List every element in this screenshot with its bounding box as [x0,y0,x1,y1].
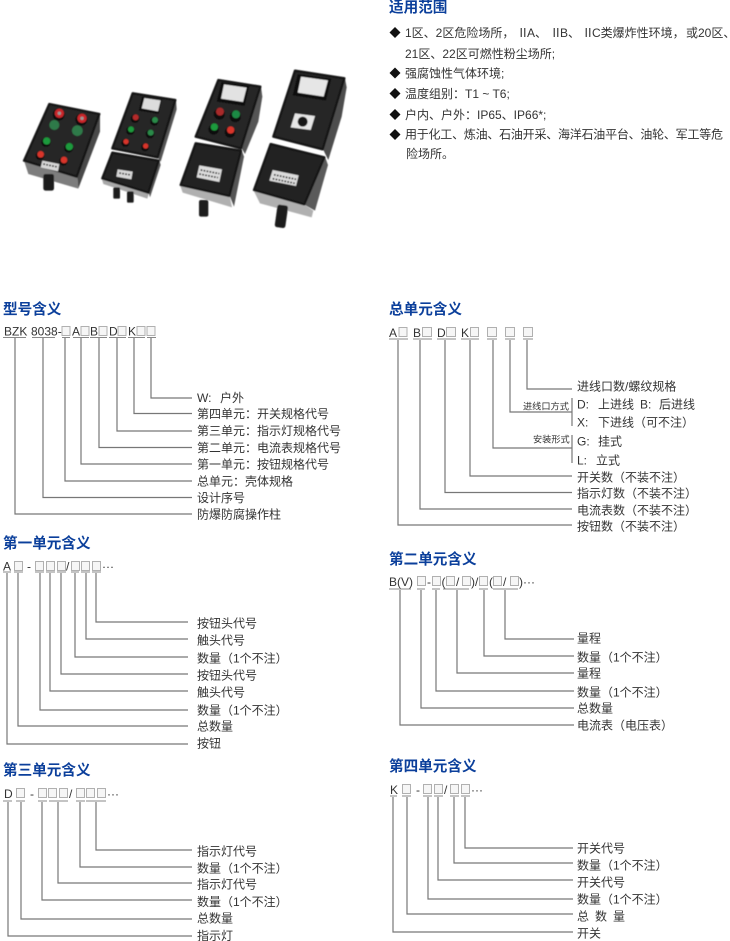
bullet list: 21区、22区可燃性粉尘场所; [405,46,555,61]
second unit code row: B(V) [389,575,413,589]
bullet list: 强腐蚀性气体环境; [405,66,504,80]
leader: total quantity [407,797,625,924]
leader: switch code [465,797,625,856]
model code row: 8038- [31,324,62,338]
leader: total quantity: 总数量 [197,718,233,734]
leader: design number [43,338,245,505]
second unit code row: )/ [471,575,479,589]
first unit code row: A [3,560,11,574]
leader: quantity [40,573,288,718]
panel: first unit meaning [3,534,288,750]
heading: general unit meaning: 总单元含义 [389,300,462,318]
leader: first unit: 第一单元：按钮规格代号 [197,456,329,472]
leader: ammeter or voltmeter: 电流表（电压表） [577,718,673,732]
product 4: meter, rotary switch and terminal box [253,71,347,228]
leader: quantity: 数量（1个不注） [577,858,668,872]
bullet list: C类爆炸性环境， [592,25,685,40]
heading: second unit meaning: 第二单元含义 [389,550,477,568]
fourth unit code row: K [390,783,398,797]
leader: general unit: 总单元：壳体规格 [197,474,293,488]
leader: button count [398,340,685,534]
leader: switch [393,797,601,940]
product photo: four explosion-proof control boxes [24,71,347,228]
leader: quantity: 数量（1个不注） [197,650,288,666]
leader: ammeter count: 电流表数（不装不注） [577,502,697,518]
panel: fourth unit meaning [389,757,668,940]
second unit code row: / [503,575,507,589]
leader: switch: 开关 [577,926,601,940]
panel: general unit meaning [389,300,697,534]
leader: button [7,573,221,750]
leader: total quantity [18,573,233,734]
leader: quantity: 数量（1个不注） [577,684,668,700]
leader: button head code: 按钮头代号 [197,616,257,630]
bullet list: Ⅱ [550,26,562,40]
leader: outdoor: 户外 [220,390,244,405]
bullet list [390,25,730,161]
third unit code row: D [4,787,13,801]
general unit code row: D [437,326,446,340]
leader: total quantity: 数 [595,908,607,924]
leader: mounting form [493,340,622,468]
leader: ammeter or voltmeter [400,590,673,732]
product 1: two-row button box [24,104,100,191]
third unit code row: ··· [107,787,119,801]
heading: fourth unit meaning: 第四单元含义 [389,757,477,775]
fourth unit code row: - [416,783,420,797]
third unit code row: - [30,787,34,801]
model code row: B [90,324,98,338]
second unit code row: ( [489,575,493,589]
leader: inlet method: 下进线（可不注） [598,414,694,430]
first unit code row: ··· [102,560,114,574]
leader: second unit [99,338,341,455]
third unit code row: / [69,787,73,801]
bullet list: 户内、户外：IP65、IP66*; [405,107,546,122]
leader: switch count [470,340,685,484]
leader: ammeter count [420,340,697,518]
leader: total quantity [421,590,613,716]
first unit code row: / [66,560,70,574]
bullet list: 险场所。 [406,146,454,161]
leader: lamp code [96,802,257,858]
leader: button head code: 按钮头代号 [197,668,257,682]
model code row: A [72,324,80,338]
leader: total quantity [21,802,233,926]
leader: switch code [438,797,625,890]
panel: applicable scope [389,0,730,161]
general unit code row: A [389,326,397,340]
first unit code row: - [27,560,31,574]
leader: fourth unit: 第四单元：开关规格代号 [197,406,329,421]
model code row: K [128,324,136,338]
leader: contact code: 触头代号 [197,686,245,700]
model code row [3,324,156,338]
leader: total quantity: 量 [613,910,625,924]
second unit code row [389,575,535,589]
leader: contact code [86,573,245,648]
leader: mounting form: L: [577,454,587,468]
leader: inlet count and thread: 进线口数/螺纹规格 [577,378,676,394]
leader: design number: 设计序号 [197,490,245,505]
general unit code row: B [413,326,421,340]
leader: mounting form: 立式 [596,452,620,468]
leader: contact code: 触头代号 [197,634,245,648]
leader: general unit [65,338,293,488]
leader: range [505,590,601,646]
leader: inlet method: X: [577,416,588,430]
leader: quantity [42,802,288,909]
leader: inlet method: 上进线 [598,398,634,412]
leader: range: 量程 [577,630,601,646]
leader: control post [15,338,281,522]
heading: applicable scope: 适用范围 [389,0,447,16]
leader: button: 按钮 [197,736,221,750]
panel: second unit meaning [389,550,673,732]
leader: third unit [117,338,341,438]
leader: quantity: 数量（1个不注） [577,892,668,906]
leader: fourth unit [134,338,329,421]
bullet list: Ⅱ [582,26,594,40]
panel: third unit meaning [3,761,288,941]
leader: indicator lamp [8,802,233,941]
heading: model meaning: 型号含义 [3,300,62,318]
heading: third unit meaning: 第三单元含义 [3,761,91,779]
leader: control post: 防爆防腐操作柱 [197,506,281,522]
leader: range [457,590,601,680]
leader: contact code [50,573,245,700]
leader: total quantity: 总数量 [577,700,613,716]
model code row: D [109,324,118,338]
general unit code row: K [461,326,469,340]
leader: total quantity: 总数量 [197,910,233,926]
bullet list: 1区、2区危险场所， [405,25,514,40]
leader: quantity: 数量（1个不注） [197,894,288,909]
leader: mounting form: G: [577,434,590,448]
third unit code row [3,787,119,801]
leader: quantity [454,797,668,872]
leader: outdoor: W: [197,391,211,405]
second unit code row: - [427,575,431,589]
fourth unit code row: / [444,783,448,797]
leader: switch code: 开关代号 [577,876,625,890]
leader: mounting form: 挂式 [598,434,622,448]
leader: inlet method: 进线口方式 [523,400,569,412]
leader: button head code [96,573,257,630]
second unit code row: ( [442,575,446,589]
heading: first unit meaning: 第一单元含义 [3,534,91,552]
leader: inlet method: 后进线 [659,398,695,412]
leader: outdoor [151,338,244,405]
leader: quantity [436,590,668,700]
leader: lamp code [58,802,257,892]
leader: second unit: 第二单元：电流表规格代号 [197,440,341,455]
bullet list: 温度组别：T1 ~ T6; [405,86,510,101]
leader: quantity [484,590,668,664]
bullet list: 用于化工、炼油、石油开采、海洋石油平台、油轮、军工等危 [405,126,723,142]
product 2: meter and lamp box [102,93,177,203]
panel: model meaning [3,300,341,522]
leader: quantity [75,573,288,666]
leader: lamp count: 指示灯数（不装不注） [577,486,697,500]
bullet list: B、 [560,26,580,40]
leader: quantity [428,797,668,906]
general unit code row [389,326,533,340]
leader: quantity: 数量（1个不注） [197,860,288,876]
leader: quantity: 数量（1个不注） [197,702,288,718]
leader: mounting form: 安装形式 [533,434,570,444]
bullet list: A、 [527,26,547,40]
leader: quantity: 数量（1个不注） [577,650,668,664]
leader: button head code [61,573,257,682]
first unit code row [3,560,114,574]
bullet list: Ⅱ [517,26,529,40]
leader: inlet count and thread [527,340,676,394]
leader: inlet method [510,340,695,430]
leader: quantity [80,802,288,876]
leader: range: 量程 [577,666,601,680]
leader: third unit: 第三单元：指示灯规格代号 [197,423,341,438]
leader: total quantity: 总 [577,910,589,924]
leader: inlet method: B: [640,398,651,412]
leader: lamp count [445,340,697,500]
fourth unit code row: ··· [471,783,483,797]
second unit code row: / [456,575,460,589]
fourth unit code row [390,783,483,797]
leader: switch count: 开关数（不装不注） [577,470,685,484]
leader: lamp code: 指示灯代号 [197,844,257,858]
product 3: meter, lamps and terminal box [180,80,262,217]
leader: lamp code: 指示灯代号 [197,876,257,892]
second unit code row: )··· [519,575,535,589]
leader: first unit [81,338,329,472]
leader: switch code: 开关代号 [577,842,625,856]
leader: inlet method: D: [577,398,589,412]
leader: button count: 按钮数（不装不注） [577,518,685,534]
model code row: BZK [4,324,27,338]
